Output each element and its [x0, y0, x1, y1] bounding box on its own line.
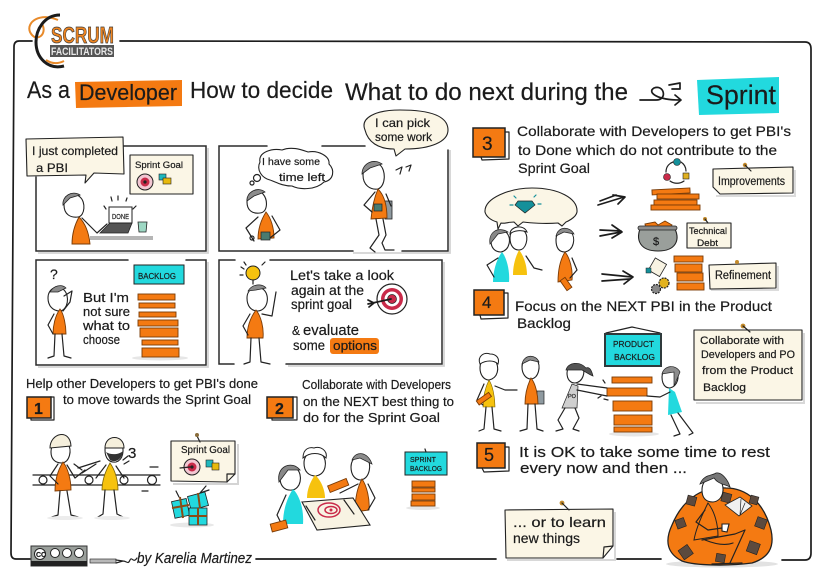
heading 5: It is OK to take some time to rest [519, 445, 770, 461]
text: But I'm not sure what to choose: But I'm [83, 290, 129, 305]
number badge 4: 4 [482, 293, 491, 312]
note: Improvements [713, 163, 795, 196]
note: Technical Debt: Debt [697, 238, 719, 248]
text: and evaluate some options: options [333, 338, 378, 353]
arrow: to technical debt [600, 225, 622, 238]
sign: SPRINT BACKLOG: SPRINT [410, 455, 436, 464]
number badge 4 [474, 290, 508, 319]
title highlight: Developer: Developer [79, 80, 177, 105]
backlog stack [132, 294, 188, 360]
sign: BACKLOG [134, 265, 184, 284]
arrow: to improvements [598, 195, 625, 205]
heading 4 [515, 298, 772, 331]
illustration: developers and PO [476, 353, 693, 436]
number badge 5 [477, 443, 509, 472]
sign: PRODUCT BACKLOG: PRODUCT [613, 339, 654, 349]
text: Let's take a look again at the sprint goal [290, 268, 394, 312]
note: Sprint Goal with pin: Sprint Goal [181, 445, 230, 456]
heading 1: Help other Developers to get PBI's done [26, 376, 258, 391]
note: Sprint Goal: Sprint Goal [135, 160, 183, 170]
speech bubble: I just completed a PBI [26, 137, 124, 183]
sign: BACKLOG: BACKLOG [138, 271, 176, 281]
number badge 2 [267, 397, 297, 420]
heading 2: do for the Sprint Goal [303, 410, 440, 425]
text: But I'm not sure what to choose [82, 290, 130, 347]
number badge 3 [473, 128, 509, 160]
improvement cycle and stack [651, 158, 700, 210]
refinement icons and stack [646, 256, 704, 294]
product backlog stack [607, 377, 659, 436]
option 2: collaborate on next best thing [267, 377, 454, 532]
speech bubble: I can pick some work: I can pick [375, 116, 431, 130]
logo: Scrum Facilitators [29, 15, 114, 67]
icon: light bulb [240, 262, 265, 284]
illustration: conveyor belt workers [33, 434, 160, 520]
note: collaborate with developers and PO: Developers and PO [701, 349, 795, 361]
illustration: conveyor belt workers: 3 [128, 445, 136, 462]
number badge 2: 2 [275, 401, 284, 418]
number badge 3: 3 [482, 134, 493, 155]
thinking developer [246, 190, 280, 241]
option 5: rest or learn [477, 443, 778, 568]
note: collaborate with developers and PO: Collaborate with [700, 335, 784, 347]
panel: not sure what to choose [36, 260, 208, 367]
note: or to learn new things [505, 501, 615, 560]
note: Technical Debt [687, 217, 731, 248]
title: What to do next during the [345, 79, 628, 106]
icon: sprint loop arrow [640, 83, 681, 105]
heading 3 [517, 123, 791, 176]
illustration: developers and PO: PO [568, 394, 577, 400]
logo: Scrum Facilitators: SCRUM [51, 22, 114, 48]
heading 3: Collaborate with Developers to get PBI's [517, 123, 791, 139]
note: or to learn new things: ... or to learn [513, 514, 606, 530]
thought cloud: I have some time left: time left [279, 172, 325, 184]
sign: SPRINT BACKLOG [405, 449, 447, 475]
heading 2 [302, 377, 454, 425]
panel: time left [219, 110, 450, 253]
icon: target with arrow [368, 284, 407, 314]
illustration: three developers [487, 227, 577, 291]
developer with idea [243, 285, 276, 364]
note: Refinement [709, 260, 778, 290]
sprint backlog stack [406, 481, 440, 510]
title highlight: Sprint [697, 77, 779, 115]
title [27, 77, 779, 115]
number badge 1: 1 [34, 401, 43, 418]
icon: pot of technical debt [638, 221, 677, 251]
note: or to learn new things: new things [513, 530, 580, 546]
heading 2: on the NEXT best thing to [303, 394, 454, 409]
option 4: focus on next PBI [474, 290, 804, 436]
thought cloud: I have some time left [250, 148, 333, 189]
text: and evaluate some options: some [293, 337, 325, 353]
logo: Scrum Facilitators: FACILITATORS [51, 46, 113, 58]
note: collaborate with developers and PO: from the Product [702, 365, 793, 377]
panel: take a look again [219, 260, 444, 366]
title: As a [27, 77, 71, 104]
note: Sprint Goal with pin [171, 433, 238, 484]
text: But I'm not sure what to choose: not sure [83, 304, 130, 319]
title: How to decide [190, 77, 333, 103]
note: Sprint Goal [130, 155, 193, 194]
icon: pen [90, 558, 137, 563]
text: and evaluate some options: & [292, 323, 300, 338]
number badge 5: 5 [484, 445, 494, 465]
option 1: help other developers [26, 376, 258, 528]
speech bubble: I just completed a PBI: a PBI [36, 161, 68, 175]
heading 4: Focus on the NEXT PBI in the Product [515, 298, 772, 314]
speech bubble: I can pick some work [364, 110, 448, 156]
confused developer: ? [50, 266, 58, 282]
icon: gift boxes [170, 486, 214, 528]
sign: PRODUCT BACKLOG: BACKLOG [614, 352, 655, 362]
heading 1: to move towards the Sprint Goal [63, 392, 251, 407]
note: Technical Debt: Technical [689, 226, 727, 236]
number badge 1 [27, 397, 54, 420]
sign: SPRINT BACKLOG: BACKLOG [410, 464, 442, 473]
credits [31, 546, 252, 567]
heading 1 [26, 376, 258, 407]
creative commons badge: CC [36, 552, 46, 559]
signature: by Karelia Martinez [137, 550, 252, 567]
panel: just completed a PBI [26, 137, 208, 253]
text: But I'm not sure what to choose: choose [83, 332, 120, 347]
creative commons badge [31, 546, 87, 566]
arrow: to refinement [602, 271, 633, 284]
standing developer with book [362, 161, 411, 252]
thought cloud: I have some time left: I have some [262, 156, 320, 168]
text: and evaluate some options: evaluate [303, 322, 359, 339]
note: Refinement: Refinement [715, 270, 772, 282]
speech bubble: I just completed a PBI: I just completed [32, 144, 118, 158]
note: collaborate with developers and PO: Backlog [703, 382, 746, 394]
text: But I'm not sure what to choose: what to [82, 318, 130, 333]
developer at laptop: DONE [112, 214, 129, 221]
developer at laptop [63, 193, 153, 244]
heading 5 [519, 445, 770, 477]
heading 4: Backlog [517, 315, 571, 331]
illustration: team around target board [270, 447, 375, 532]
illustration: developer on beanbag with book [666, 473, 778, 568]
text: Let's take a look again at the sprint goal: again at the [291, 283, 364, 298]
icon: pot of technical debt: $ [653, 236, 659, 248]
heading 3: Sprint Goal [518, 160, 590, 176]
heading 5: every now and then ... [520, 461, 687, 477]
title highlight: Sprint: Sprint [706, 80, 776, 110]
heading 3: to Done which do not contribute to the [518, 142, 777, 158]
heading 2: Collaborate with Developers [302, 377, 451, 392]
note: collaborate with developers and PO [694, 324, 804, 403]
text: Let's take a look again at the sprint goal: Let's take a look [290, 268, 394, 283]
speech bubble with shared idea [485, 188, 577, 229]
option 3: collaborate on non-goal PBIs [473, 123, 795, 294]
text: and evaluate some options [292, 322, 379, 354]
confused developer [48, 266, 72, 358]
speech bubble: I can pick some work: some work [375, 130, 433, 144]
note: Improvements: Improvements [718, 174, 785, 188]
sign: PRODUCT BACKLOG [605, 327, 661, 366]
text: Let's take a look again at the sprint goal: sprint goal [291, 297, 352, 312]
